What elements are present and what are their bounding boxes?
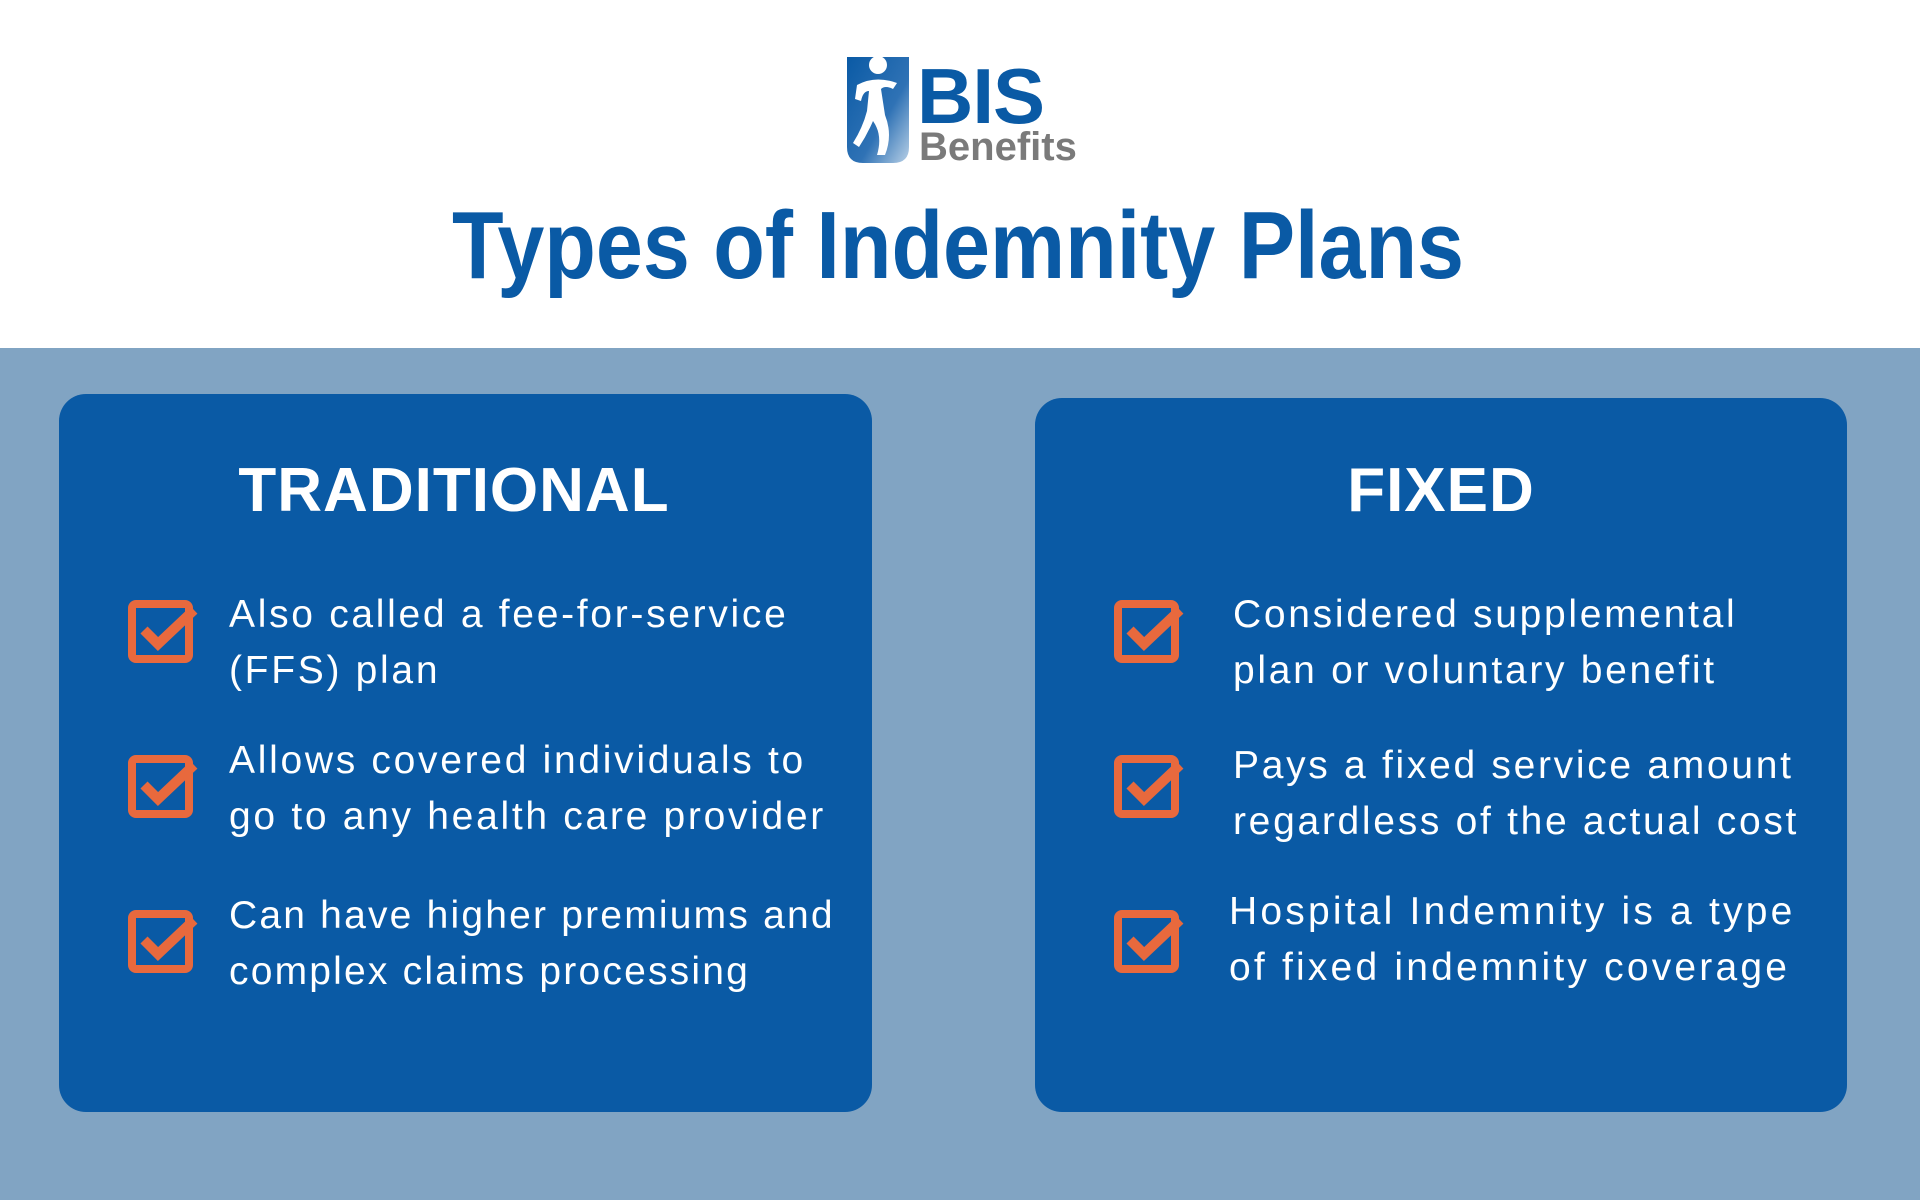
text: bullet 4: plan or voluntary benefit xyxy=(1233,649,1717,692)
icon: checkbox 3 xyxy=(128,910,198,973)
icon: checkbox 6 xyxy=(1114,910,1184,973)
text: bullet 4: Considered supplemental xyxy=(1233,593,1737,636)
text: bullet 6: Hospital Indemnity is a type xyxy=(1229,890,1796,933)
text: bullet 3: complex claims processing xyxy=(229,950,750,993)
text: bullet 6: of fixed indemnity coverage xyxy=(1229,946,1790,989)
text: bullet 1: Also called a fee-for-service xyxy=(229,593,788,636)
icon: checkbox 4 xyxy=(1114,600,1184,663)
text: bullet 2 xyxy=(229,739,826,838)
text: bullet 1 xyxy=(229,593,788,692)
text: bullet 5 xyxy=(1233,744,1799,843)
logo text: Benefits: Benefits xyxy=(919,125,1077,169)
logo xyxy=(847,52,1077,169)
panel: traditional xyxy=(59,394,872,1112)
text: bullet 4 xyxy=(1233,593,1737,692)
icon: checkbox 1 xyxy=(128,600,198,663)
heading: traditional: TRADITIONAL xyxy=(238,456,670,525)
text: bullet 2: Allows covered individuals to xyxy=(229,739,806,782)
icon: runner shield xyxy=(847,57,909,163)
panel: fixed xyxy=(1035,398,1847,1112)
text: bullet 3 xyxy=(229,894,835,993)
text: bullet 5: Pays a fixed service amount xyxy=(1233,744,1794,787)
text: bullet 1: (FFS) plan xyxy=(229,649,440,692)
logo text: BIS: BIS xyxy=(917,52,1044,140)
heading: fixed: FIXED xyxy=(1347,456,1535,525)
icon: checkbox 2 xyxy=(128,755,198,818)
text: bullet 2: go to any health care provider xyxy=(229,795,826,838)
text: bullet 3: Can have higher premiums and xyxy=(229,894,835,937)
text: bullet 5: regardless of the actual cost xyxy=(1233,800,1799,843)
icon: checkbox 5 xyxy=(1114,755,1184,818)
text: bullet 6 xyxy=(1229,890,1796,989)
